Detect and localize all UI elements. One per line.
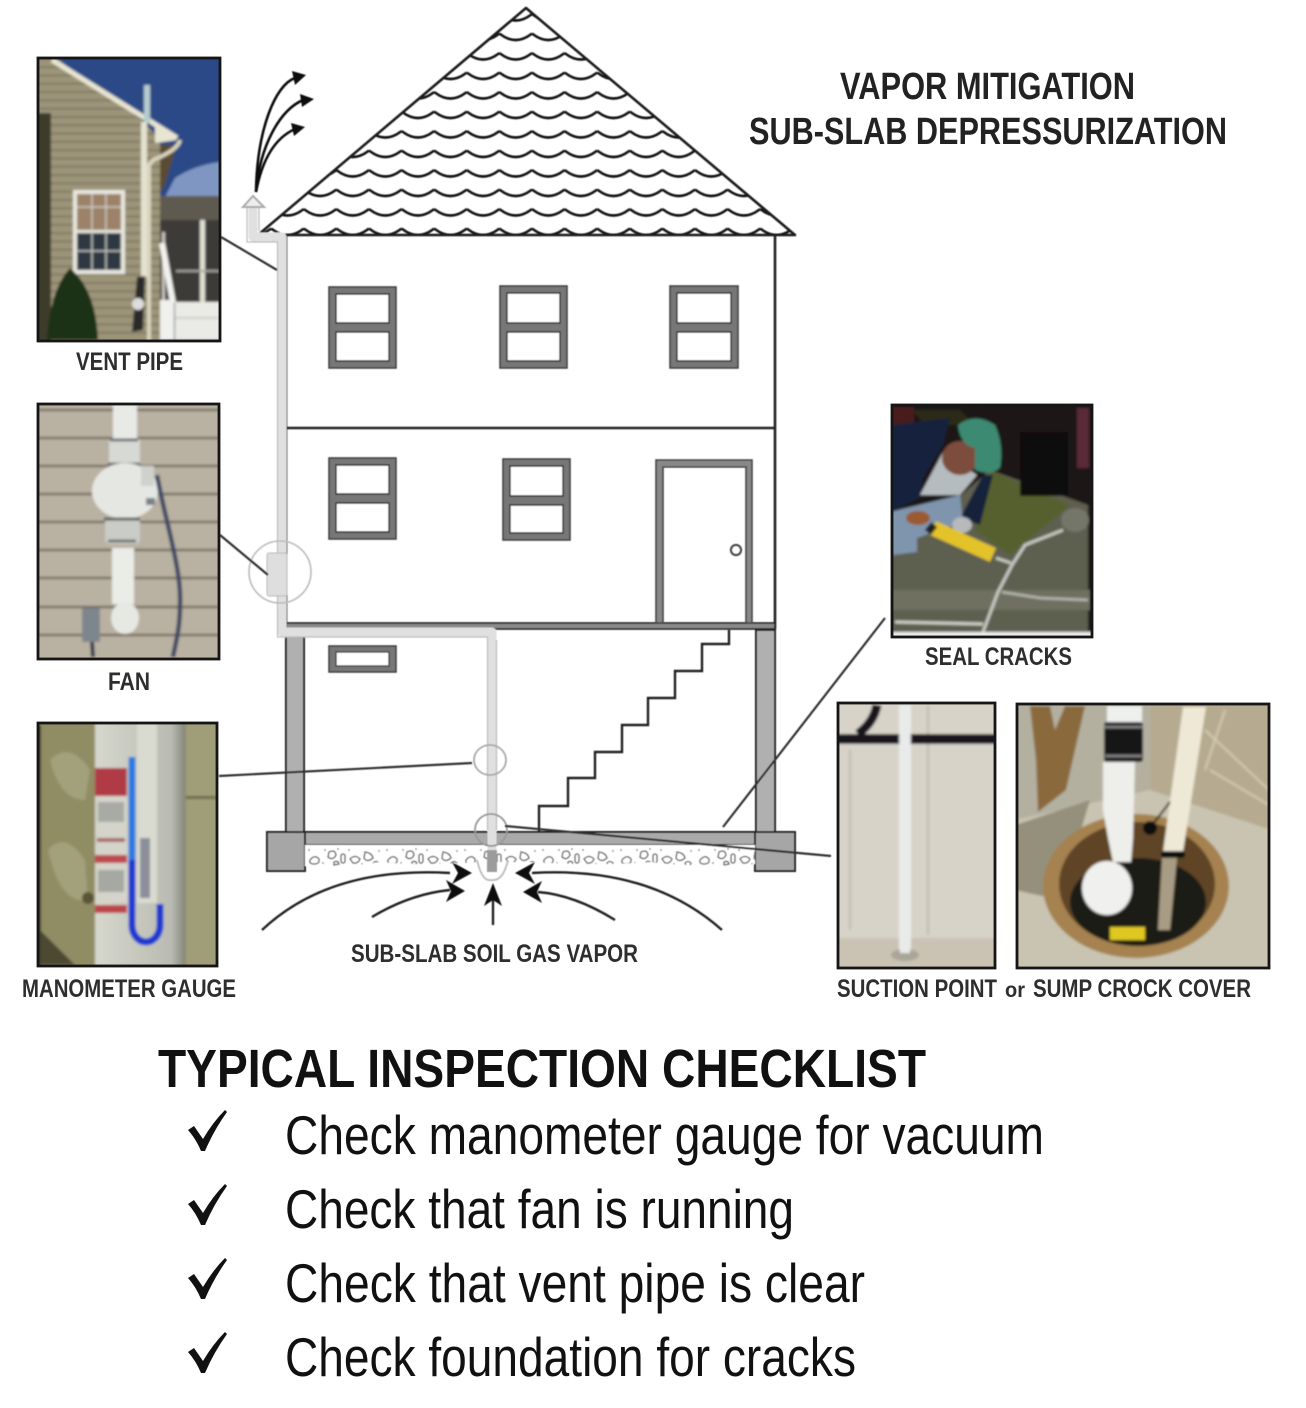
photo captions and diagram labels: SEAL CRACKS [925, 643, 1072, 671]
photo: vent pipe [36, 56, 222, 343]
photo: fan [36, 402, 221, 661]
photo captions and diagram labels: MANOMETER GAUGE [22, 975, 236, 1003]
checklist [188, 1104, 1044, 1388]
photo: sump crock cover [1015, 702, 1271, 970]
photo captions and diagram labels [22, 348, 1251, 1003]
title: VAPOR MITIGATION [840, 66, 1135, 108]
gravel layer [305, 845, 755, 870]
photo captions and diagram labels: SUB-SLAB SOIL GAS VAPOR [351, 940, 638, 968]
item: foundation: Check foundation for cracks [285, 1326, 856, 1388]
photo: manometer gauge [36, 721, 219, 968]
vent pipe routing [253, 206, 492, 862]
leader lines [219, 237, 885, 856]
photo frame: fan [38, 404, 219, 659]
vent cap [243, 196, 264, 207]
photo captions and diagram labels: FAN [108, 668, 150, 696]
door with knob [656, 460, 752, 623]
photo captions and diagram labels: or [1005, 979, 1025, 1002]
photo frame: sump crock cover [1017, 704, 1269, 968]
photo: seal cracks [890, 403, 1094, 639]
photo frame: seal cracks [892, 405, 1092, 637]
upper and lower windows [329, 286, 738, 540]
photo captions and diagram labels: VENT PIPE [76, 348, 183, 376]
panel: house diagram [219, 8, 885, 930]
manometer location ellipse [474, 745, 506, 775]
title [749, 66, 1227, 153]
photo frame: vent pipe [38, 58, 220, 341]
soil gas vapor arrows [262, 862, 722, 930]
exhaust arrows rising from vent [256, 71, 314, 192]
photo captions and diagram labels: SUCTION POINT [837, 975, 997, 1003]
upper house walls and floor lines [286, 235, 775, 629]
item: fan: Check that fan is running [285, 1178, 794, 1240]
roof with scalloped shingles [258, 8, 795, 235]
stairs [539, 630, 729, 832]
item: vent pipe: Check that vent pipe is clear [285, 1252, 865, 1314]
fan box and circle [249, 541, 311, 603]
foundation slab and footings [267, 832, 795, 871]
photo captions and diagram labels: SUMP CROCK COVER [1033, 975, 1251, 1003]
vent pipe outline [247, 206, 496, 830]
basement walls [286, 630, 775, 832]
photo frame: suction point [838, 703, 995, 968]
suction point circle and dome [475, 814, 508, 880]
photo: suction point [836, 701, 997, 970]
basement window [329, 646, 396, 672]
item: manometer: Check manometer gauge for vacuum [285, 1104, 1044, 1166]
checklist heading: TYPICAL INSPECTION CHECKLIST [158, 1039, 926, 1099]
photo frame: manometer gauge [38, 723, 217, 966]
